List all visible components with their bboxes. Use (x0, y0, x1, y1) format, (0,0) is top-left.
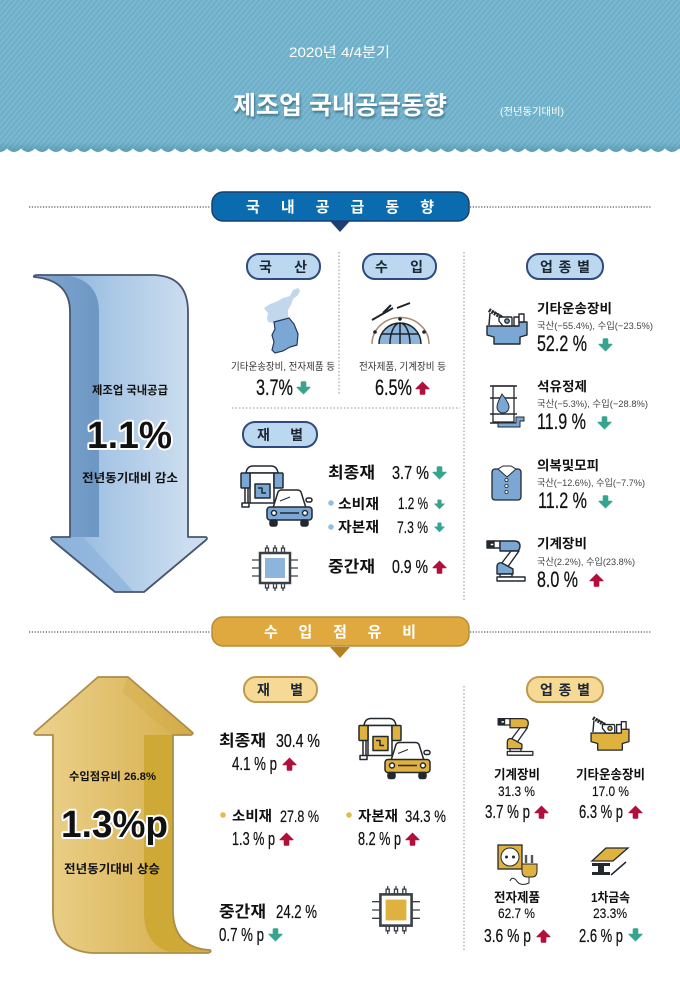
big arrow: supply down (34, 275, 207, 592)
arrow: up (415, 382, 430, 395)
pill: by goods (243, 422, 317, 447)
item: consumer goods: 1.3 % p (232, 828, 275, 849)
big arrow: supply down: 1.1% (87, 415, 172, 457)
item: consumer goods (220, 808, 319, 849)
big arrow: import share up (34, 677, 211, 953)
item: final goods (219, 730, 320, 774)
icon: factory and car (241, 466, 312, 526)
item: apparel: 의복및모피 (537, 458, 599, 473)
big arrow: import share up: 전년동기대비 상승 (64, 861, 160, 876)
big arrow: supply down: 전년동기대비 감소 (82, 470, 178, 485)
title: 제조업 국내공급동향 (233, 92, 447, 120)
item: capital goods: 8.2 % p (358, 828, 401, 849)
icon: shirt (492, 466, 521, 500)
item: apparel (537, 458, 645, 513)
pill: by goods: 재 별 (257, 427, 303, 443)
panel: domestic production (231, 254, 335, 400)
item: transport equipment: 기타운송장비 (537, 301, 612, 316)
item: apparel: 11.2 % (538, 488, 587, 513)
item: petroleum: 국산(−5.3%), 수입(−28.8%) (537, 398, 648, 410)
row: capital goods (328, 519, 445, 537)
item: machinery: 기계장비 (494, 767, 540, 782)
item: machinery: 8.0 % (537, 567, 578, 592)
row: consumer goods: 소비재 (338, 496, 379, 512)
value: 6.5%: 6.5% (375, 375, 412, 400)
row: capital goods: 7.3 % (397, 519, 428, 537)
subtitle note: (전년동기대비) (500, 106, 564, 118)
big arrow: import share up: 수입점유비 26.8% (69, 770, 156, 783)
item: transport equipment: 국산(−55.4%), 수입(−23.5%) (537, 320, 653, 332)
text: items: 기타운송장비, 전자제품 등 (231, 361, 335, 373)
item: transport equipment: 6.3 % p (579, 801, 623, 822)
item: intermediate goods: 중간재 (219, 903, 266, 921)
item: consumer goods: 27.8 % (280, 808, 319, 826)
row: final goods: 3.7 % (392, 462, 429, 483)
item: intermediate goods: 0.7 % p (219, 924, 264, 945)
section header: import share: 수 입 점 유 비 (264, 624, 416, 641)
icon: chip (252, 545, 298, 591)
pill: by industry: 업 종 별 (540, 259, 590, 275)
big arrow: import share up: 1.3%p (61, 804, 168, 846)
panel: by industry (487, 254, 653, 592)
row: intermediate goods (328, 556, 447, 577)
row: intermediate goods: 0.9 % (392, 556, 428, 577)
value: 3.7%: 3.7% (256, 375, 293, 400)
icon: oil barrel (490, 386, 524, 427)
panel: share by industry (484, 677, 645, 946)
item: electronics (484, 890, 551, 946)
section header: domestic supply: 국 내 공 급 동 향 (246, 199, 434, 216)
icon: factory and car (359, 718, 430, 778)
item: machinery: 31.3 % (498, 783, 535, 799)
row: final goods (328, 462, 447, 483)
item: final goods: 최종재 (219, 732, 266, 750)
item: primary metals: 23.3% (593, 905, 627, 921)
row: consumer goods (328, 495, 445, 513)
row: capital goods: 자본재 (338, 519, 379, 535)
item: electronics: 전자제품 (494, 890, 540, 905)
arrow: down (296, 381, 311, 394)
item: transport equipment: 52.2 % (537, 331, 587, 356)
icon: chip (372, 886, 420, 934)
panel: share by goods type (219, 677, 446, 945)
item: transport equipment: 기타운송장비 (576, 767, 645, 782)
item: machinery: 기계장비 (537, 536, 587, 551)
item: machinery (485, 767, 549, 822)
icon: steel beam (592, 848, 628, 875)
item: apparel: 국산(−12.6%), 수입(−7.7%) (537, 477, 645, 489)
big arrow: supply down: 제조업 국내공급 (92, 383, 168, 397)
item: petroleum: 11.9 % (537, 409, 586, 434)
row: consumer goods: 1.2 % (398, 495, 428, 513)
pill: by industry (527, 254, 603, 279)
icon: robot arm (498, 719, 533, 755)
item: final goods: 30.4 % (276, 730, 320, 751)
item: machinery (537, 536, 635, 592)
pill: by goods (244, 677, 317, 702)
date label: 2020년 4/4분기 (289, 44, 390, 60)
item: consumer goods: 소비재 (232, 808, 272, 824)
item: primary metals: 2.6 % p (579, 925, 623, 946)
item: primary metals (579, 890, 643, 946)
item: intermediate goods (219, 901, 317, 945)
item: petroleum: 석유정제 (537, 379, 587, 394)
item: intermediate goods: 24.2 % (276, 901, 317, 922)
item: machinery: 국산(2.2%), 수입(23.8%) (537, 556, 635, 568)
item: transport equipment (537, 301, 653, 356)
pill: by industry: 업 종 별 (540, 682, 590, 698)
item: machinery: 3.7 % p (485, 801, 530, 822)
icon: ship (487, 310, 527, 344)
item: transport equipment (576, 767, 645, 822)
pill: production: 국 산 (259, 259, 307, 275)
section header: domestic supply (29, 192, 651, 232)
pill: by goods: 재 별 (257, 682, 303, 698)
section header: import share (29, 617, 651, 658)
item: primary metals: 1차금속 (591, 890, 630, 905)
header banner (0, 0, 680, 155)
item: capital goods: 자본재 (358, 808, 398, 824)
row: intermediate goods: 중간재 (328, 558, 375, 576)
pill: by industry (527, 677, 603, 702)
pill: imports: 수 입 (375, 259, 423, 275)
icon: korea map (264, 288, 300, 353)
icon: ship (591, 718, 629, 750)
icon: electric plug (498, 845, 537, 884)
item: final goods: 4.1 % p (232, 753, 277, 774)
item: electronics: 62.7 % (498, 905, 535, 921)
panel: imports (359, 254, 446, 400)
divider line lower (463, 686, 465, 950)
pill: imports (363, 254, 436, 279)
pill: production (247, 254, 320, 279)
panel: by goods type (241, 422, 447, 591)
item: electronics: 3.6 % p (484, 925, 531, 946)
item: capital goods (346, 808, 446, 849)
row: final goods: 최종재 (328, 464, 375, 482)
icon: globe and plane (372, 303, 429, 344)
item: transport equipment: 17.0 % (592, 783, 629, 799)
text: items: 전자제품, 기계장비 등 (359, 361, 446, 373)
divider lines upper (232, 252, 464, 600)
icon: robot arm (487, 541, 525, 581)
item: petroleum (537, 379, 648, 434)
item: capital goods: 34.3 % (405, 808, 446, 826)
